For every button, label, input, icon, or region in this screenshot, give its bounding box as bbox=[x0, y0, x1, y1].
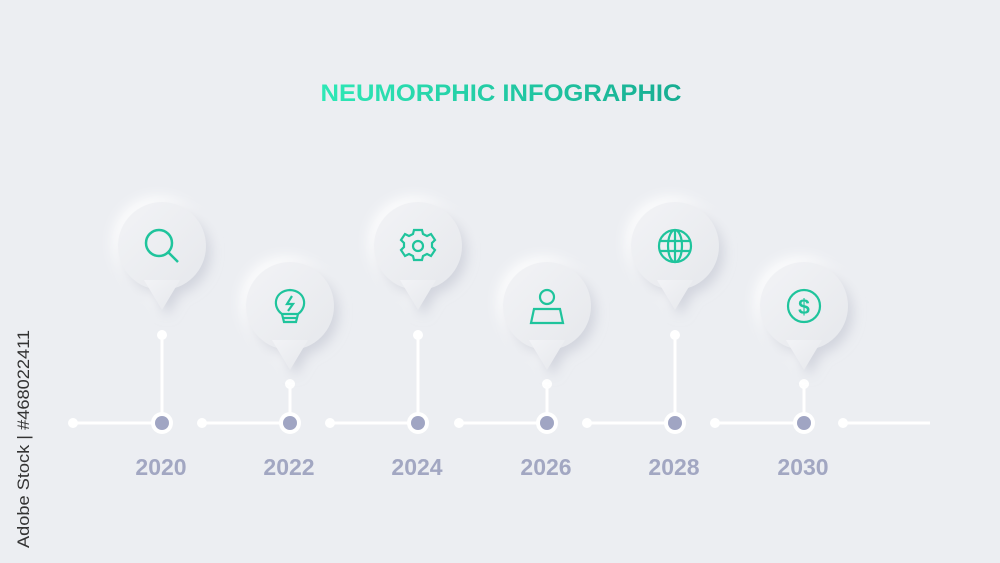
year labels: 2026 bbox=[520, 454, 572, 480]
year labels bbox=[135, 454, 829, 480]
side credit: Adobe Stock | #468022411 bbox=[14, 330, 33, 548]
year labels: 2030 bbox=[777, 454, 829, 480]
timeline nodes bbox=[151, 412, 815, 434]
title: NEUMORPHIC INFOGRAPHIC bbox=[320, 80, 682, 107]
pin 5: globe bbox=[631, 202, 719, 310]
year labels: 2022 bbox=[263, 454, 315, 480]
pin 6: dollar: $ bbox=[798, 296, 810, 319]
pin 4: person on map bbox=[503, 262, 591, 370]
timeline track bbox=[70, 332, 930, 426]
pin 1: search bbox=[118, 202, 206, 310]
pin 3: gear bbox=[374, 202, 462, 310]
pin 6: dollar bbox=[760, 262, 848, 370]
year labels: 2028 bbox=[648, 454, 700, 480]
year labels: 2024 bbox=[391, 454, 443, 480]
year labels: 2020 bbox=[135, 454, 187, 480]
pin 2: bulb bbox=[246, 262, 334, 370]
